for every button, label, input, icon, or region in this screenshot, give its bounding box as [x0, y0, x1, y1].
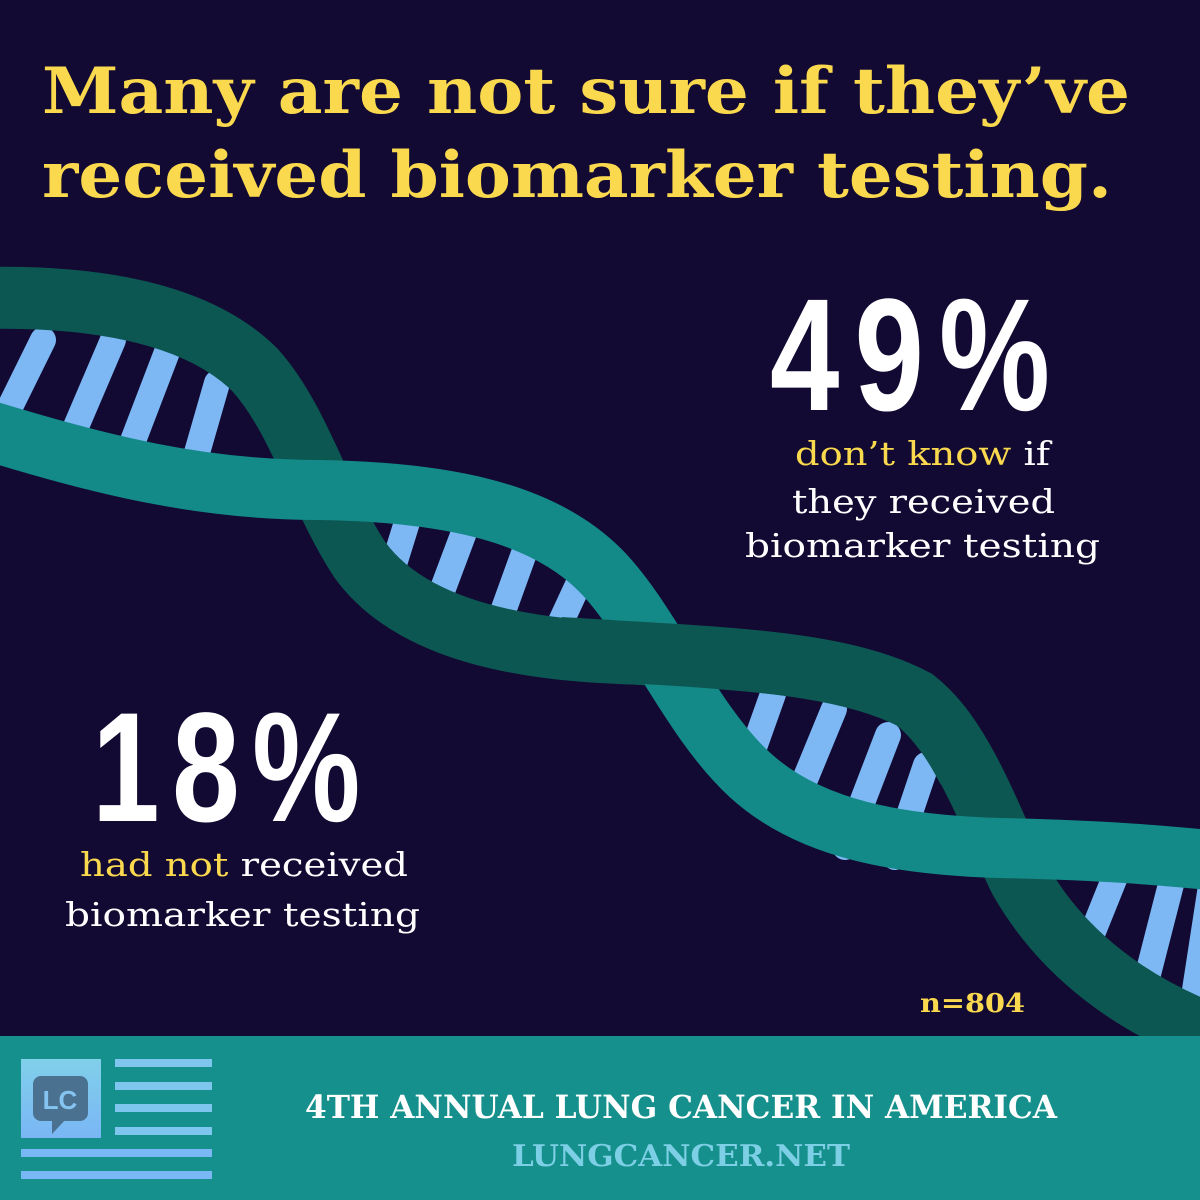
footer text: 4TH ANNUAL LUNG CANCER IN AMERICA [305, 1088, 1058, 1126]
stat text: had not: biomarker testing [65, 895, 420, 934]
stat: 18%: 18% [92, 679, 360, 854]
stat text: don't know: biomarker testing [745, 526, 1100, 565]
stat: 18% [65, 679, 420, 934]
dna helix [0, 298, 1200, 1045]
light strand [0, 428, 1200, 862]
stat: 49% [745, 266, 1100, 565]
footer [0, 1036, 1200, 1200]
logo: LC [43, 1085, 78, 1115]
title [42, 54, 1130, 213]
footer text [305, 1088, 1058, 1174]
dna rungs [7, 340, 1200, 990]
title: received biomarker testing. [42, 138, 1112, 213]
dark strand crossing over [560, 648, 968, 770]
stat text: don't know [745, 434, 1100, 565]
logo [21, 1059, 212, 1179]
sample size: n=804 [920, 989, 1025, 1019]
title: Many are not sure if they’ve [42, 54, 1130, 129]
footer text: LUNGCANCER.NET [512, 1139, 851, 1174]
stat: 49%: 49% [770, 266, 1050, 445]
dark strand [0, 298, 1200, 1045]
stat text: don't know: they received [792, 482, 1055, 521]
stat text: don't know: don’t know if [795, 434, 1053, 473]
stat text: had not [65, 845, 420, 934]
stat text: had not: had not received [80, 845, 408, 884]
